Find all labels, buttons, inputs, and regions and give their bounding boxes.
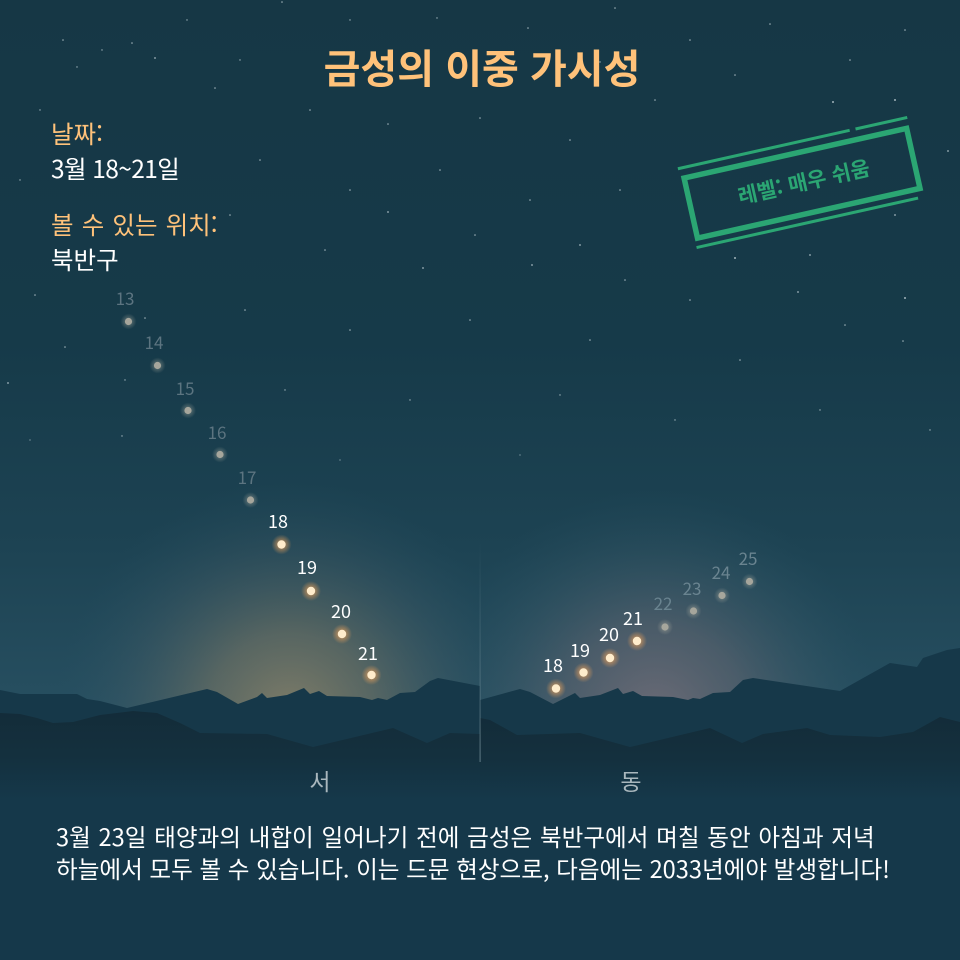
east path: visible dates, 18 to 21: 20 bbox=[599, 621, 619, 647]
difficulty stamp bbox=[678, 117, 925, 248]
title: 금성의 이중 가시성 bbox=[324, 37, 640, 95]
east path: past dates, 22 to 25: 24 bbox=[712, 559, 730, 584]
east path: visible dates, 18 to 21: 18 bbox=[543, 652, 563, 678]
stamp text: 레벨: 매우 쉬움 bbox=[735, 152, 873, 211]
west path: past dates, 13 to 17: 16 bbox=[208, 419, 226, 444]
east path: past dates, 22 to 25: 25 bbox=[739, 545, 757, 570]
visibility info: 북반구 bbox=[51, 242, 119, 277]
east path: past dates, 22 to 25: 22 bbox=[654, 590, 672, 615]
description bbox=[56, 819, 890, 885]
west path: visible dates, 18 to 21: 18 bbox=[268, 508, 288, 534]
east path: visible dates, 18 to 21: 19 bbox=[570, 637, 590, 663]
back mountains: east bbox=[480, 648, 960, 760]
west path: past dates, 13 to 17: 15 bbox=[176, 375, 194, 400]
west path: visible dates, 18 to 21: 21 bbox=[358, 640, 378, 666]
west and east divider bbox=[480, 540, 481, 762]
west path: past dates, 13 to 17: 13 bbox=[116, 285, 134, 310]
west path: visible dates, 18 to 21: 19 bbox=[297, 554, 317, 580]
west path: visible dates, 18 to 21: 20 bbox=[331, 598, 351, 624]
date info bbox=[51, 116, 179, 186]
front mountains: west bbox=[0, 711, 480, 800]
back mountains: west bbox=[0, 678, 480, 760]
date info: 3월 18~21일 bbox=[51, 151, 179, 186]
east path: past dates, 22 to 25 bbox=[654, 545, 758, 635]
visibility info bbox=[51, 207, 218, 277]
description: 3월 23일 태양과의 내합이 일어나기 전에 금성은 북반구에서 며칠 동안 아침과 저녁 bbox=[56, 819, 875, 853]
front mountains: east bbox=[480, 717, 960, 800]
east path: past dates, 22 to 25: 23 bbox=[683, 575, 701, 600]
eastern horizon glow bbox=[480, 480, 890, 750]
date info: 날짜: bbox=[51, 116, 103, 151]
west path: past dates, 13 to 17 bbox=[116, 285, 258, 508]
east path: visible dates, 18 to 21: 21 bbox=[623, 605, 643, 631]
description: 하늘에서 모두 볼 수 있습니다. 이는 드문 현상으로, 다음에는 2033년에야 발생합니다! bbox=[56, 851, 890, 885]
west path: visible dates, 18 to 21 bbox=[268, 508, 382, 685]
west path: past dates, 13 to 17: 14 bbox=[145, 329, 163, 354]
visibility info: 볼 수 있는 위치: bbox=[51, 207, 218, 242]
western horizon glow bbox=[50, 470, 480, 750]
west path: past dates, 13 to 17: 17 bbox=[238, 464, 256, 489]
stars bbox=[7, 1, 949, 461]
direction label: west: 서 bbox=[309, 763, 331, 797]
east path: visible dates, 18 to 21 bbox=[543, 605, 647, 698]
direction label: east: 동 bbox=[620, 763, 642, 797]
